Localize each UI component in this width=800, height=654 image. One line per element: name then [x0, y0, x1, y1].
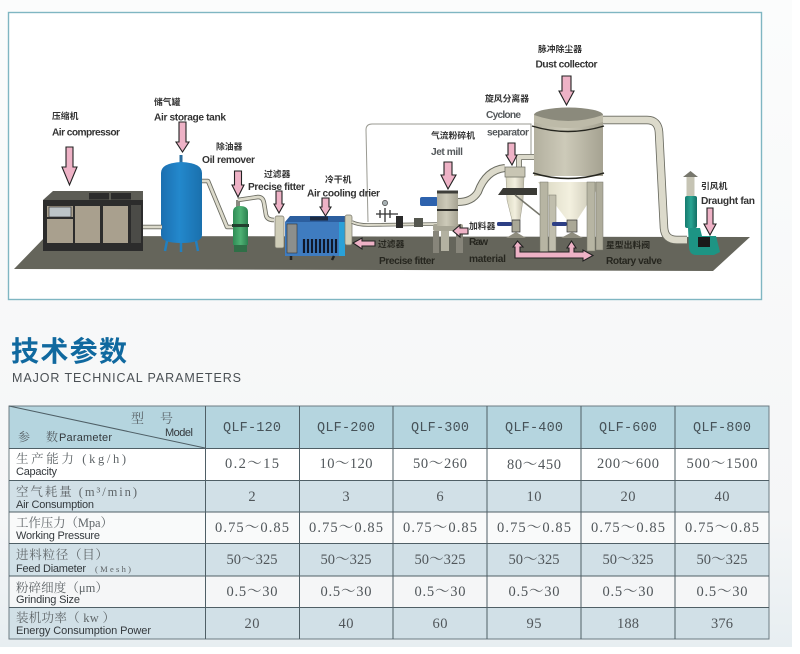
table header: model names: QLF-400	[505, 421, 563, 436]
arrow: oil remover	[232, 171, 244, 197]
row: working pressure: 0.75～0.85	[403, 520, 477, 536]
row: capacity: 80～450	[507, 457, 561, 473]
row: feed diameter: 进料粒径（目）	[16, 547, 108, 562]
label: cyclone separator: separator	[487, 128, 529, 138]
heading: Chinese title: 技术参数	[11, 336, 127, 367]
label: dust collector: 脉冲除尘器	[538, 42, 582, 55]
label: jet mill: Jet mill	[431, 147, 463, 158]
row: grinding size: 粉碎细度（μm）	[16, 580, 108, 595]
label: air storage tank: 储气罐	[154, 95, 181, 108]
row: air consumption: 空气耗量 (m³/min)	[16, 484, 137, 499]
arrow: air storage tank	[176, 122, 189, 152]
row: energy consumption power	[16, 610, 733, 637]
arrow: jet mill	[441, 162, 456, 189]
icon: jet mill	[420, 190, 463, 253]
label: jet mill	[431, 128, 475, 158]
table header: model names: QLF-300	[411, 421, 469, 436]
icon: air compressor	[43, 191, 143, 251]
row: capacity: 50～260	[413, 456, 467, 472]
table header: model names: QLF-200	[317, 421, 375, 436]
icon: precise filter right	[345, 215, 352, 245]
label: precise filter	[248, 167, 305, 193]
icon: air storage tank	[161, 155, 202, 252]
label: dust collector	[536, 42, 598, 70]
heading: English subtitle: MAJOR TECHNICAL PARAMETERS	[12, 371, 241, 385]
row: grinding size: 0.5～30	[414, 584, 466, 600]
row: grinding size: 0.5～30	[320, 584, 372, 600]
row: energy consumption power: 装机功率（ kw ）	[16, 610, 115, 625]
row: capacity: 生产能力 (kg/h)	[16, 451, 126, 466]
row: air consumption: 3	[342, 489, 350, 505]
label: cyclone separator: 旋风分离器	[485, 92, 529, 104]
icon: oil remover	[232, 200, 249, 252]
label: draught fan: 引风机	[701, 179, 728, 192]
row: working pressure: 0.75～0.85	[309, 520, 383, 536]
pipe: compressor to tank to oil remover	[143, 181, 233, 227]
row: energy consumption power: 20	[244, 616, 260, 632]
table header: parameter and model: Model	[165, 427, 193, 439]
icon: precise filter	[275, 216, 284, 248]
ground platform	[14, 236, 750, 271]
table header: model names: QLF-120	[223, 421, 281, 436]
row: air consumption: 6	[436, 489, 444, 505]
icon: pulse dust collector	[532, 108, 604, 252]
arrow: draught fan	[704, 208, 716, 235]
label: cyclone separator: Cyclone	[486, 110, 521, 121]
label: rotary valve: 星型出料阀	[606, 238, 650, 251]
row: air consumption: 10	[526, 489, 542, 505]
icon: cyclone separator	[497, 157, 540, 238]
label: air cooling drier	[307, 172, 380, 200]
row: capacity	[16, 451, 758, 478]
pipe: jet mill to cyclone	[458, 168, 505, 202]
row: grinding size: 0.5～30	[602, 584, 654, 600]
label: raw material: Raw	[469, 237, 488, 248]
row: capacity: 10～120	[320, 456, 372, 472]
row: capacity: 500～1500	[686, 456, 758, 472]
table header: model names: QLF-600	[599, 421, 657, 436]
arrow: dust collector	[559, 76, 574, 105]
row: capacity: 0.2～15	[225, 456, 279, 472]
table header: model names	[223, 421, 751, 436]
label: draught fan: Draught fan	[701, 196, 755, 207]
table header: parameter and model: 号	[160, 408, 173, 427]
row: feed diameter: 50～325	[226, 552, 278, 568]
icon: thin air line to cyclone	[366, 124, 531, 222]
label: precise filter lower: Precise fitter	[379, 256, 435, 267]
row: capacity: 200～600	[597, 456, 659, 472]
row: grinding size: Grinding Size	[16, 594, 80, 606]
label: raw material: material	[469, 254, 506, 265]
icon: draught fan	[683, 171, 720, 255]
arrow: raw material	[453, 225, 468, 237]
label: air compressor: 压缩机	[52, 109, 79, 122]
row: energy consumption power: 60	[432, 616, 448, 632]
row: feed diameter: 50～325	[602, 552, 654, 568]
table header: parameter and model: 数	[46, 428, 58, 445]
row: working pressure: 工作压力（Mpa）	[16, 515, 113, 530]
label: air storage tank	[154, 95, 226, 124]
label: oil remover: 除油器	[216, 140, 243, 152]
row: working pressure	[16, 515, 759, 542]
label: air compressor: Air compressor	[52, 128, 120, 138]
label: cyclone separator	[485, 92, 529, 138]
table header: model names: QLF-800	[693, 421, 751, 436]
row: air consumption	[16, 484, 730, 511]
row: feed diameter: 50～325	[508, 552, 560, 568]
row: grinding size: 0.5～30	[226, 584, 278, 600]
table header: parameter and model: 型	[131, 408, 144, 427]
label: oil remover	[202, 140, 255, 166]
row: working pressure: Working Pressure	[16, 530, 100, 542]
label: raw material	[469, 219, 506, 265]
label: air compressor	[52, 109, 120, 138]
row: working pressure: 0.75～0.85	[497, 520, 571, 536]
label: precise filter lower: 过滤器	[378, 237, 405, 250]
row: feed diameter: Feed Diameter	[16, 563, 86, 575]
row: energy consumption power: 40	[338, 616, 354, 632]
row: energy consumption power: Energy Consumption Power	[16, 625, 151, 637]
arrow: precise filter	[274, 191, 284, 213]
row: grinding size: 0.5～30	[696, 584, 748, 600]
pipe: oil remover to filter	[238, 197, 274, 220]
table header: parameter and model: 参	[18, 428, 30, 445]
label: precise filter: 过滤器	[264, 167, 291, 180]
row: air consumption: 40	[714, 489, 730, 505]
row: energy consumption power: 95	[526, 616, 542, 632]
arrow: air compressor	[62, 147, 77, 185]
label: rotary valve: Rotary valve	[606, 256, 662, 267]
row: working pressure: 0.75～0.85	[215, 520, 289, 536]
label: jet mill: 气流粉碎机	[431, 128, 475, 142]
table header: parameter and model	[18, 408, 193, 445]
row: feed diameter: 50～325	[696, 552, 748, 568]
row: energy consumption power: 376	[711, 616, 733, 632]
row: working pressure: 0.75～0.85	[591, 520, 665, 536]
row: working pressure: 0.75～0.85	[685, 520, 759, 536]
row: capacity: Capacity	[16, 466, 58, 478]
pipe: dust collector to draught fan	[603, 120, 687, 240]
table header: parameter and model: Parameter	[59, 432, 112, 444]
label: air cooling drier: 冷干机	[325, 172, 352, 186]
panel: process flow diagram	[8, 12, 762, 300]
pipe: air line with valves	[352, 200, 437, 228]
row: grinding size	[16, 580, 748, 606]
arrow: air cooling drier	[320, 198, 331, 216]
arrow: precise filter left	[353, 238, 375, 249]
label: precise filter lower	[378, 237, 435, 267]
row: feed diameter: (Mesh)	[95, 564, 131, 574]
label: dust collector: Dust collector	[536, 60, 598, 70]
row: air consumption: Air Consumption	[16, 499, 94, 511]
label: air storage tank: Air storage tank	[154, 112, 226, 124]
label: draught fan	[701, 179, 755, 207]
row: feed diameter: 50～325	[320, 552, 372, 568]
row: grinding size: 0.5～30	[508, 584, 560, 600]
row: feed diameter: 50～325	[414, 552, 466, 568]
row: air consumption: 2	[248, 489, 256, 505]
icon: air cooling drier	[285, 216, 345, 260]
label: rotary valve	[606, 238, 662, 267]
label: air cooling drier: Air cooling drier	[307, 188, 380, 200]
arrow: rotary valves	[513, 241, 593, 261]
row: feed diameter	[16, 547, 748, 575]
row: air consumption: 20	[620, 489, 636, 505]
label: precise filter: Precise fitter	[248, 182, 305, 193]
arrow: cyclone separator	[506, 143, 517, 165]
row: energy consumption power: 188	[617, 616, 639, 632]
label: raw material: 加料器	[469, 219, 496, 232]
label: oil remover: Oil remover	[202, 155, 255, 166]
table: technical parameters	[9, 406, 769, 639]
